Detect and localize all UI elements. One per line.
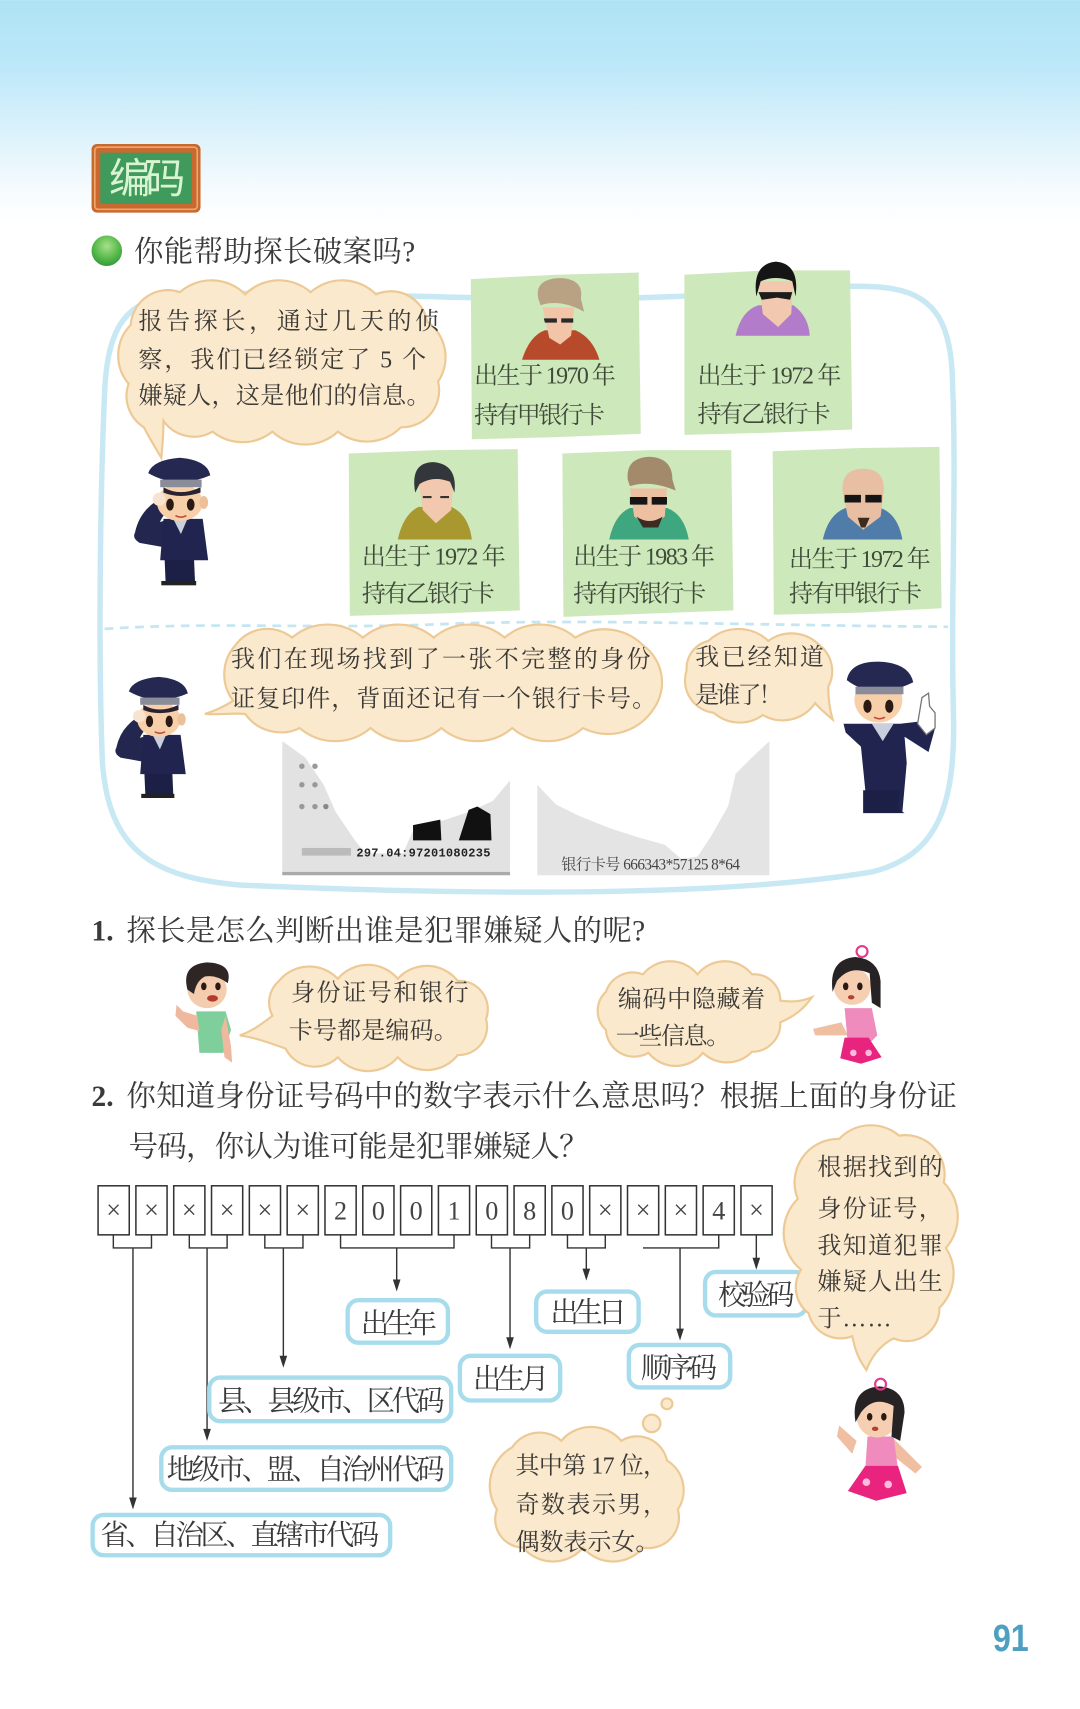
speech bubble: ID and bank numbers are codes: 卡号都是编码。 (289, 1018, 458, 1045)
torn ID card photocopy: 297.04:97201080235 (356, 847, 490, 861)
label: check digit: 校验码 (718, 1280, 794, 1312)
ID number digit boxes: × (295, 1195, 310, 1224)
speech bubble: evidence found: 证复印件，背面还记有一个银行卡号。 (231, 685, 656, 712)
thought bubble: digit 17 meaning (490, 1427, 684, 1562)
speech bubble: report: 嫌疑人，这是他们的信息。 (138, 382, 430, 409)
panel: case outline (100, 286, 954, 892)
ID number digit boxes (98, 1186, 772, 1235)
ID number digit boxes: 2 (334, 1197, 347, 1226)
police officer pointing up (844, 662, 935, 813)
suspect card 3 (349, 449, 520, 616)
suspect card 5: 出生于 1972 年 (789, 546, 931, 573)
label: birth month (460, 1356, 560, 1400)
speech bubble: ID and bank numbers are codes (240, 965, 488, 1071)
label: birth day (536, 1292, 639, 1332)
suspect card 5: 持有甲银行卡 (789, 581, 922, 608)
torn ID card photocopy (282, 741, 510, 875)
thought bubble: digit 17 meaning: 偶数表示女。 (515, 1529, 659, 1556)
ID number digit boxes: 4 (712, 1197, 725, 1226)
label: birth year: 出生年 (361, 1308, 437, 1340)
ID number digit boxes: × (144, 1195, 159, 1224)
ID number digit boxes: × (636, 1195, 650, 1224)
police officer saluting, top (134, 458, 210, 585)
ID number digit boxes: × (598, 1195, 613, 1224)
label: check digit (705, 1272, 806, 1315)
girl character pointing (813, 946, 882, 1064)
background sky gradient (0, 0, 1080, 224)
question 1: 探长是怎么判断出谁是犯罪嫌疑人的呢? (126, 915, 645, 948)
speech bubble: birth deduction (784, 1125, 958, 1370)
suspect card 3: 出生于 1972 年 (362, 544, 506, 571)
question 2: 2. (92, 1081, 114, 1113)
speech bubble: I know who (685, 629, 833, 723)
suspect card 1: 出生于 1970 年 (474, 363, 616, 390)
speech bubble: birth deduction: 根据找到的 (817, 1154, 943, 1181)
speech bubble: birth deduction: 身份证号， (817, 1195, 943, 1222)
label: sequence code (629, 1345, 730, 1387)
brackets and arrows (113, 1235, 760, 1509)
speech bubble: birth deduction: 于…… (817, 1306, 891, 1332)
speech bubble: info hidden in codes: 一些信息。 (616, 1023, 730, 1050)
question 1: 1. (92, 916, 114, 948)
suspect card 3: 持有乙银行卡 (362, 581, 495, 608)
ID number digit boxes: 0 (485, 1197, 498, 1226)
question 2: 号码，你认为谁可能是犯罪嫌疑人？ (129, 1130, 588, 1163)
girl character lower (837, 1379, 922, 1501)
label: birth day: 出生日 (550, 1297, 627, 1329)
torn bank card number paper: 银行卡号 666343*57125 8*64 (561, 856, 740, 874)
ID number digit boxes: 8 (523, 1197, 536, 1226)
suspect card 4: 持有丙银行卡 (573, 581, 706, 608)
speech bubble: report: 报告探长，通过几天的侦 (138, 308, 439, 335)
ID number digit boxes: × (182, 1195, 197, 1224)
ID number digit boxes: 0 (372, 1197, 385, 1226)
speech bubble: birth deduction: 我知道犯罪 (817, 1232, 943, 1259)
speech bubble: report: 察，我们已经锁定了 5 个 (138, 346, 426, 373)
label: province code: 省、自治区、直辖市代码 (100, 1519, 379, 1551)
thought bubbles (643, 1398, 672, 1432)
ID number digit boxes: 1 (447, 1197, 461, 1226)
label: birth month: 出生月 (473, 1364, 549, 1396)
speech bubble: ID and bank numbers are codes: 身份证号和银行 (291, 980, 469, 1007)
label: county code (209, 1378, 451, 1421)
suspect card 4: 出生于 1983 年 (573, 544, 715, 571)
ID number digit boxes: × (674, 1195, 688, 1224)
suspect card 2: 持有乙银行卡 (697, 401, 830, 428)
thought bubble: digit 17 meaning: 奇数表示男， (515, 1492, 667, 1519)
suspect card 1: 持有甲银行卡 (474, 402, 605, 429)
label: prefecture code: 地级市、盟、自治州代码 (167, 1454, 445, 1486)
suspect card 1 (471, 273, 641, 439)
section badge: 编码 (92, 144, 201, 213)
speech bubble: I know who: 是谁了！ (695, 682, 782, 709)
suspect card 5 (773, 447, 942, 615)
boy character (175, 962, 232, 1063)
suspect card 2 (684, 262, 852, 435)
thought bubble: digit 17 meaning: 其中第 17 位， (515, 1453, 667, 1480)
police officer saluting, lower (115, 677, 188, 798)
suspect card 4 (562, 450, 733, 617)
heading with green bullet: 你能帮助探长破案吗? (134, 236, 415, 269)
section badge: 编码: 编码 (109, 156, 185, 202)
torn bank card number paper (537, 741, 769, 875)
speech bubble: birth deduction: 嫌疑人出生 (817, 1268, 943, 1295)
label: sequence code: 顺序码 (641, 1353, 717, 1385)
ID number digit boxes: × (220, 1195, 234, 1224)
label: prefecture code (161, 1447, 451, 1490)
speech bubble: report (118, 280, 446, 458)
suspect card 2: 出生于 1972 年 (697, 363, 841, 390)
label: county code: 县、县级市、区代码 (218, 1385, 445, 1417)
ID number digit boxes: × (749, 1195, 764, 1224)
ID number digit boxes: 0 (561, 1197, 574, 1226)
ID number digit boxes: × (106, 1195, 121, 1224)
speech bubble: I know who: 我已经知道 (695, 644, 824, 671)
speech bubble: info hidden in codes (598, 961, 812, 1066)
speech bubble: evidence found (205, 625, 662, 741)
page number: 91 (993, 1617, 1029, 1660)
ID number digit boxes: 0 (410, 1197, 423, 1226)
speech bubble: info hidden in codes: 编码中隐藏着 (618, 986, 765, 1013)
label: birth year (348, 1300, 448, 1343)
question 2: 你知道身份证号码中的数字表示什么意思吗？根据上面的身份证 (126, 1080, 957, 1113)
ID number digit boxes: × (258, 1195, 272, 1224)
speech bubble: evidence found: 我们在现场找到了一张不完整的身份 (231, 646, 651, 673)
question 2 (92, 1080, 957, 1163)
